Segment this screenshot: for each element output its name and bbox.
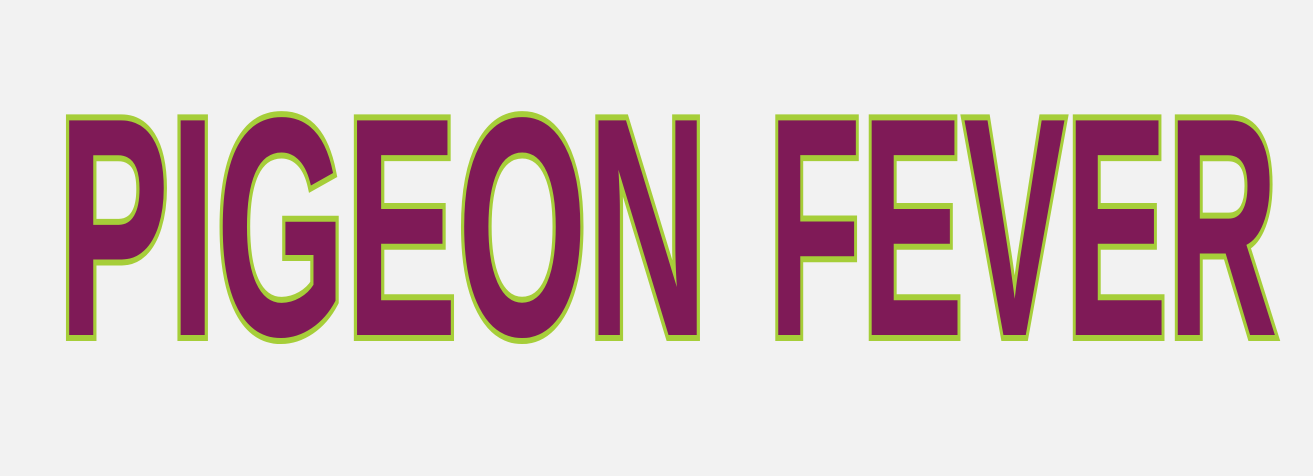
title word: PIGEON: PIGEON xyxy=(58,54,708,402)
